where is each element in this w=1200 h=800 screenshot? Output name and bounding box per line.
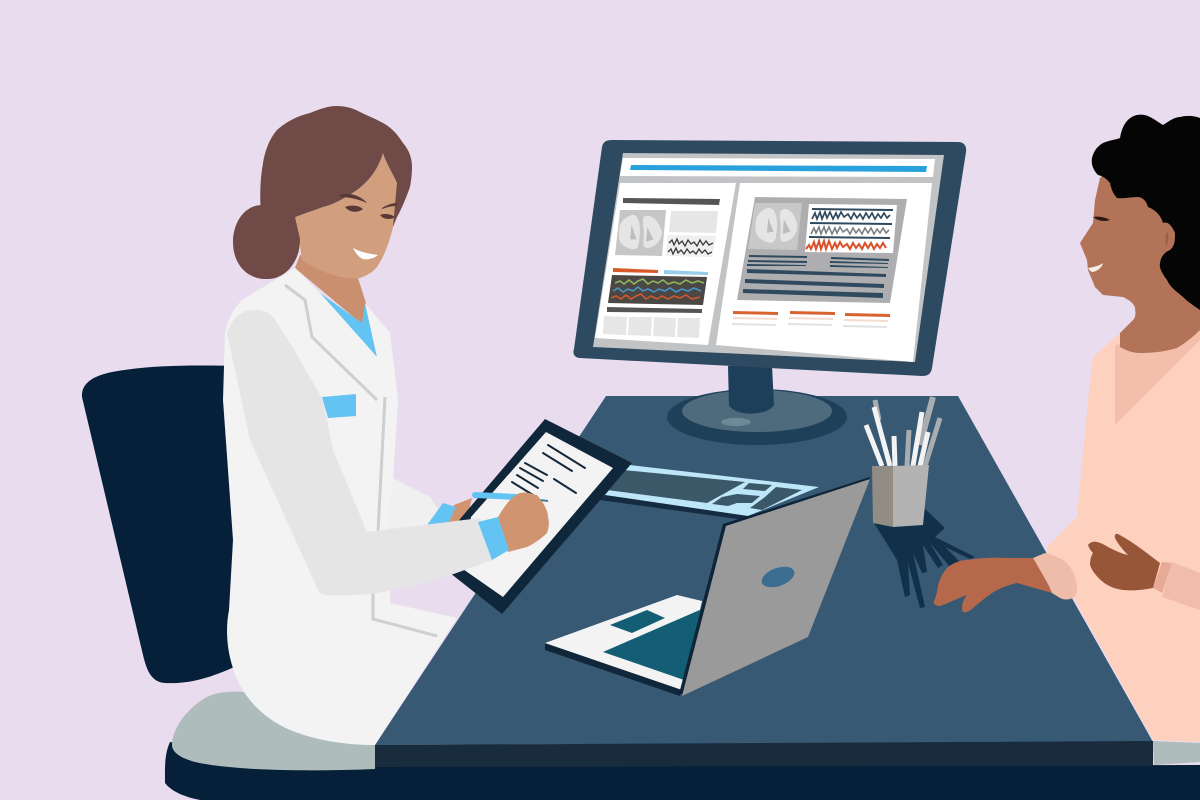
left screen panel: [595, 183, 736, 345]
patient sweater: [1047, 330, 1200, 742]
colored waveform box: [608, 275, 707, 305]
chair seat: [172, 692, 375, 770]
text lines: [743, 255, 889, 298]
sweater V-neck: [1115, 328, 1200, 425]
eyebrows: [340, 194, 397, 209]
laptop: [545, 477, 870, 696]
monitor stand base: [667, 389, 847, 445]
near cuff: [478, 517, 509, 560]
cup left face: [872, 466, 893, 527]
seat far side: [1153, 741, 1200, 765]
breast pocket: [322, 394, 356, 418]
patient smile: [1088, 263, 1103, 272]
laptop trackpad: [610, 610, 665, 633]
pen cup: [866, 397, 975, 608]
far sleeve: [385, 478, 447, 540]
ear: [1160, 223, 1175, 250]
keyboard: [600, 465, 819, 520]
brain scan large: [748, 203, 802, 250]
thumbnail boxes: [603, 316, 700, 338]
patient head and neck: [1080, 160, 1200, 353]
cup shadow: [874, 507, 975, 608]
hair: [260, 106, 412, 240]
coat seam: [373, 397, 437, 636]
clipboard: [446, 419, 632, 614]
desk front edge: [375, 741, 1153, 767]
hair bun: [233, 205, 300, 279]
smile: [353, 248, 378, 259]
desk: [375, 396, 1200, 767]
computer monitor: [573, 140, 966, 445]
far hand wrist: [446, 498, 472, 524]
brain scan small: [615, 210, 666, 256]
patient eye: [1093, 217, 1110, 221]
monitor neck: [728, 366, 774, 414]
lapel line: [285, 285, 377, 400]
large waveform chart: [805, 204, 897, 253]
laptop lid edge: [679, 477, 870, 694]
sleeve: [1162, 562, 1200, 610]
monitor screen: [593, 153, 944, 362]
chair back: [82, 366, 245, 683]
patient hair: [1092, 115, 1200, 310]
small waveform box: [666, 235, 716, 257]
written lines: [512, 445, 585, 495]
ear detail: [1165, 232, 1169, 247]
chair: [82, 366, 1200, 800]
desk hand cuff: [1033, 553, 1077, 600]
scrub collar: [320, 293, 377, 357]
near sleeve: [227, 310, 492, 595]
laptop base underside: [545, 643, 684, 696]
far cuff: [427, 503, 456, 526]
footer columns: [732, 311, 890, 328]
desk hand: [934, 558, 1052, 612]
pen: [475, 495, 548, 501]
raised hand: [1088, 534, 1160, 590]
pens: [866, 397, 940, 466]
chair base: [165, 742, 1200, 800]
laptop logo: [759, 563, 797, 591]
patient: [934, 115, 1200, 742]
writing hand: [498, 492, 549, 552]
eyes: [345, 206, 395, 219]
desk top: [375, 396, 1153, 745]
neck: [295, 255, 366, 325]
monitor bezel: [573, 140, 966, 376]
right screen panel: [716, 183, 932, 362]
face: [295, 153, 397, 278]
header bar: [620, 158, 935, 177]
laptop lid: [682, 479, 870, 696]
laptop base: [545, 595, 702, 690]
cup right face: [893, 465, 929, 527]
lab coat body: [223, 268, 457, 745]
raised hand cuff: [1153, 562, 1172, 593]
doctor: [223, 106, 632, 745]
laptop keyboard area: [603, 609, 702, 680]
